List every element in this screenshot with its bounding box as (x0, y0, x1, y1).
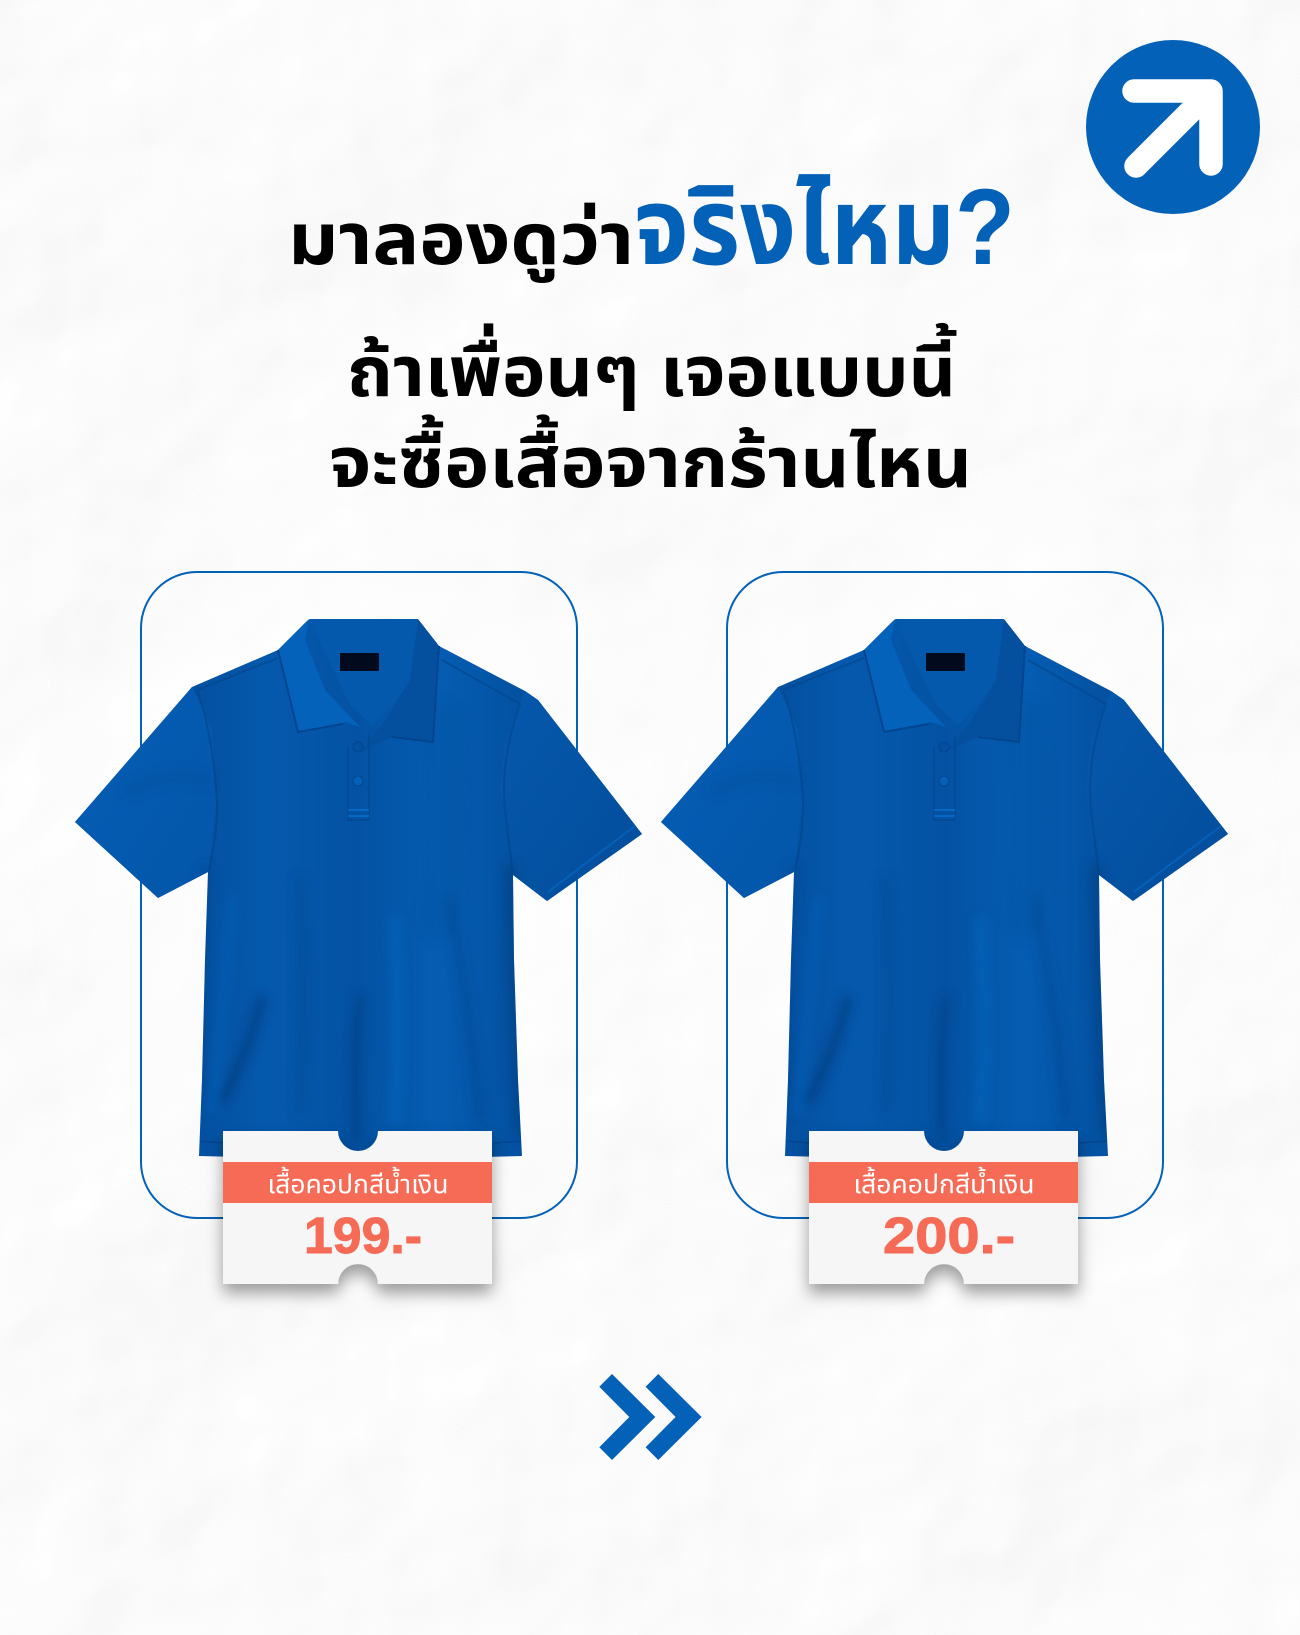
icon: arrow in blue circle (1086, 40, 1260, 214)
inner collar (309, 619, 418, 725)
panel: left frame (141, 572, 577, 1218)
price tag: left: 199.- (304, 1207, 422, 1264)
shirt: right blue polo (661, 619, 1228, 1160)
title: มาลองดูว่า (288, 200, 634, 283)
body folds (130, 720, 520, 1140)
price tag: right: เสื้อคอปกสีน้ำเงิน (854, 1166, 1034, 1199)
panel: right frame (727, 572, 1163, 1218)
price tag: left (223, 1131, 492, 1284)
icon: double chevron arrow (599, 1374, 702, 1460)
title (288, 166, 1015, 287)
price tag: right: 200.- (883, 1207, 1015, 1264)
subtitle (329, 323, 972, 502)
shirt: left blue polo (75, 619, 642, 1160)
price tag: right (809, 1131, 1078, 1284)
subtitle: ถ้าเพื่อนๆ เจอแบบนี้ (347, 323, 957, 411)
title: จริงไหม? (634, 166, 1015, 287)
price tag: left: เสื้อคอปกสีน้ำเงิน (268, 1166, 448, 1199)
subtitle: จะซื้อเสื้อจากร้านไหน (329, 414, 972, 502)
placket (348, 735, 369, 820)
